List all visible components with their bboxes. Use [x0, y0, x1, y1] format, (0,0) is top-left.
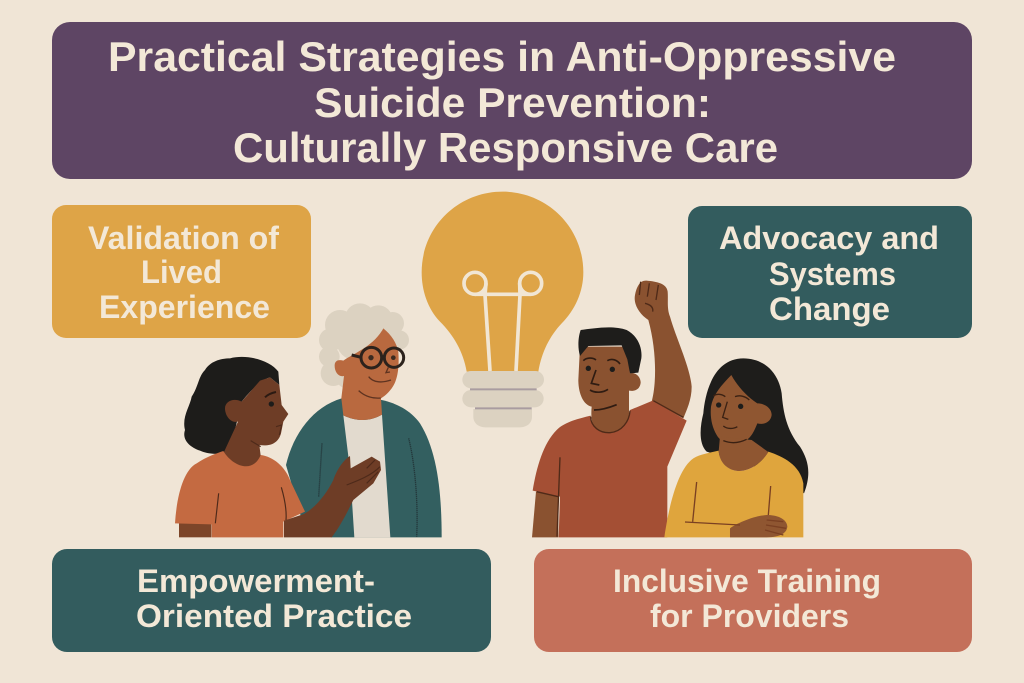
title banner: Practical Strategies in Anti-Oppressive: [108, 33, 896, 80]
smile and nose: [359, 367, 391, 398]
face and neck: [335, 328, 399, 420]
panel: validation of lived experience: Validation of: [88, 220, 279, 256]
title banner: [52, 22, 972, 179]
left arm: [532, 492, 558, 537]
face details: [586, 366, 591, 371]
panel: advocacy and systems change: Change: [769, 291, 890, 327]
title banner: Suicide Prevention:: [314, 79, 711, 126]
illustration: man with raised fist: [532, 281, 692, 537]
panel: empowerment-oriented practice: Empowerment-: [137, 563, 375, 599]
panel: advocacy and systems change: [688, 206, 972, 338]
hair: [578, 327, 642, 373]
hair: [701, 358, 808, 493]
face: [711, 375, 772, 444]
illustration: young woman with dark curly hair: [175, 357, 381, 537]
neck: [719, 437, 768, 471]
illustration: older woman with glasses: [286, 303, 442, 537]
undershirt: [343, 415, 390, 537]
crossed hand: [730, 515, 787, 537]
panel: advocacy and systems change: Systems: [769, 256, 896, 292]
hair: [184, 357, 279, 454]
shirt: [533, 401, 687, 537]
panel: inclusive training for providers: for Providers: [650, 598, 849, 634]
glasses: [352, 347, 404, 368]
sweater: [664, 451, 803, 537]
panel: validation of lived experience: Experience: [99, 289, 270, 325]
panel: empowerment-oriented practice: [52, 549, 491, 652]
shirt: [175, 451, 305, 537]
panel: inclusive training for providers: Inclusive Training: [613, 563, 881, 599]
panel: validation of lived experience: [52, 205, 311, 338]
left arm: [179, 523, 211, 537]
face details: [716, 402, 721, 408]
panel: validation of lived experience: Lived: [141, 254, 222, 290]
icon: light bulb: [422, 192, 583, 427]
panel: inclusive training for providers: [534, 549, 972, 652]
panel: empowerment-oriented practice: Oriented Practice: [136, 598, 412, 634]
curly hair: [319, 303, 409, 388]
cardigan folds: [319, 438, 417, 537]
title banner: Culturally Responsive Care: [233, 124, 778, 171]
cardigan: [286, 398, 442, 537]
raised arm and fist: [635, 281, 692, 418]
raised forearm and hand: [284, 456, 381, 537]
details: [269, 401, 274, 407]
panel: advocacy and systems change: Advocacy and: [719, 220, 939, 256]
illustration: woman with long hair: [664, 358, 808, 537]
face and neck: [223, 377, 288, 469]
head and neck: [578, 347, 641, 433]
